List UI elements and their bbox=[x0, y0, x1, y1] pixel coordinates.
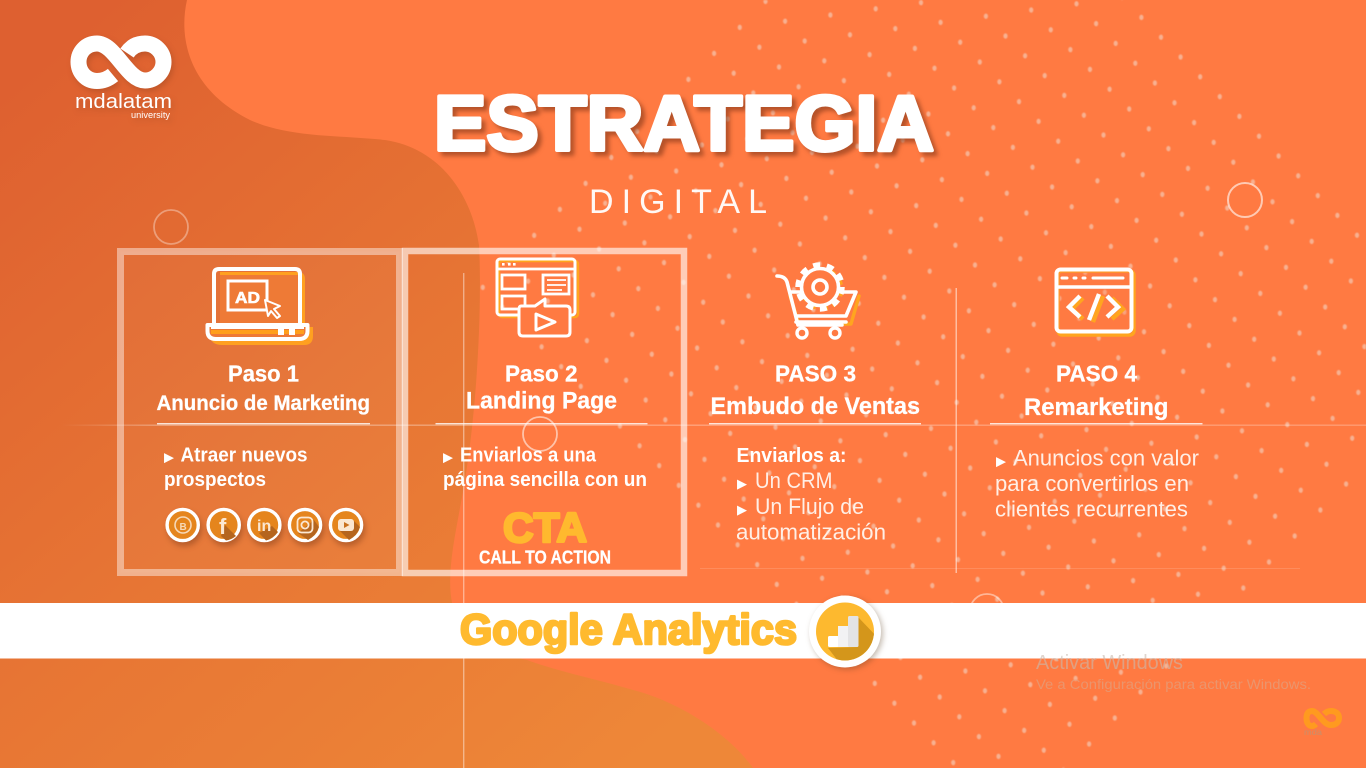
logo subtitle: university bbox=[131, 110, 171, 120]
title: ESTRATEGIA bbox=[434, 79, 934, 167]
step description: ▶ bbox=[737, 503, 747, 518]
step description: ▶ bbox=[164, 450, 174, 466]
icon: linkedin: in bbox=[257, 518, 271, 535]
icon: blog bbox=[167, 509, 198, 541]
step description: Atraer nuevos bbox=[180, 444, 308, 466]
small logo watermark: mda bbox=[1304, 728, 1323, 737]
background dot pattern bbox=[467, 0, 1366, 768]
logo bbox=[75, 44, 172, 120]
call to action label: CALL TO ACTION bbox=[479, 548, 611, 568]
step description: Un CRM bbox=[755, 468, 832, 493]
step heading: Paso 1 bbox=[228, 360, 299, 386]
step heading: Paso 2 bbox=[505, 360, 578, 386]
step description: Enviarlos a una bbox=[460, 444, 597, 466]
google analytics label: Google Analytics bbox=[460, 606, 797, 654]
icon: laptop with ad: AD bbox=[235, 290, 260, 307]
step description bbox=[164, 444, 308, 491]
subtitle: DIGITAL bbox=[589, 183, 767, 221]
icon: google analytics bbox=[809, 596, 881, 670]
step heading: PASO 4 bbox=[1056, 360, 1137, 386]
icon: code window bbox=[1056, 270, 1134, 335]
logo wordmark: mdalatam bbox=[75, 91, 172, 113]
icon: instagram bbox=[289, 509, 321, 541]
vertical guide line left bbox=[463, 273, 464, 768]
icon: laptop with ad bbox=[208, 269, 313, 345]
decorative circle behind band bbox=[970, 594, 1004, 628]
step description bbox=[736, 445, 886, 544]
decorative circle left bbox=[154, 210, 188, 244]
step description: ▶ bbox=[443, 450, 453, 466]
small logo watermark bbox=[1304, 711, 1339, 737]
step description: ▶ bbox=[996, 454, 1006, 470]
panel: paso 3 bbox=[709, 265, 921, 544]
step description: Un Flujo de bbox=[755, 494, 864, 519]
step description bbox=[443, 444, 647, 491]
step description: prospectos bbox=[164, 469, 266, 491]
horizontal guide line bbox=[62, 424, 1366, 426]
social icons bbox=[167, 509, 362, 541]
step name: Embudo de Ventas bbox=[710, 393, 920, 420]
lower guide line bbox=[700, 568, 1300, 569]
step description: Anuncios con valor bbox=[1013, 446, 1199, 470]
CTA label: CTA bbox=[503, 504, 587, 551]
icon: cart with gear bbox=[777, 265, 859, 338]
decorative circle right bbox=[1228, 183, 1262, 217]
panel: paso 4 bbox=[990, 270, 1202, 522]
step heading: PASO 3 bbox=[775, 360, 856, 386]
step description: Enviarlos a: bbox=[736, 445, 846, 467]
step name: Remarketing bbox=[1024, 394, 1168, 421]
white band bbox=[0, 603, 1366, 658]
step divider bbox=[990, 423, 1202, 424]
step description: para convertirlos en bbox=[995, 471, 1189, 496]
watermark: activar windows: Activar Windows bbox=[1036, 652, 1183, 674]
step name: Anuncio de Marketing bbox=[156, 392, 370, 415]
step name: Landing Page bbox=[466, 388, 617, 414]
step description bbox=[995, 446, 1199, 522]
logo infinity mark bbox=[78, 44, 164, 81]
decorative circle bbox=[523, 417, 557, 451]
step description: ▶ bbox=[737, 477, 747, 492]
panel: paso 1 bbox=[120, 252, 400, 572]
icon: landing page bbox=[497, 259, 578, 336]
step divider bbox=[157, 423, 370, 424]
step description: página sencilla con un bbox=[443, 469, 647, 491]
step description: automatización bbox=[736, 520, 886, 544]
watermark: activar windows bbox=[1036, 652, 1311, 692]
panel 2 frame bbox=[405, 251, 684, 573]
panel 1 frame bbox=[120, 252, 400, 572]
vertical guide line right bbox=[956, 288, 957, 573]
background blob shape bbox=[0, 0, 753, 768]
watermark: activar windows: Ve a Configuración para activar Windows. bbox=[1036, 677, 1311, 692]
step divider bbox=[709, 423, 921, 424]
step divider bbox=[436, 423, 648, 424]
step description: clientes recurrentes bbox=[995, 496, 1188, 522]
panel: paso 2 bbox=[405, 251, 684, 573]
icon: linkedin bbox=[249, 509, 280, 541]
icon: youtube bbox=[330, 509, 362, 541]
icon: blog: B bbox=[180, 522, 187, 533]
icon: facebook bbox=[208, 509, 239, 541]
icon: facebook: f bbox=[219, 514, 227, 539]
